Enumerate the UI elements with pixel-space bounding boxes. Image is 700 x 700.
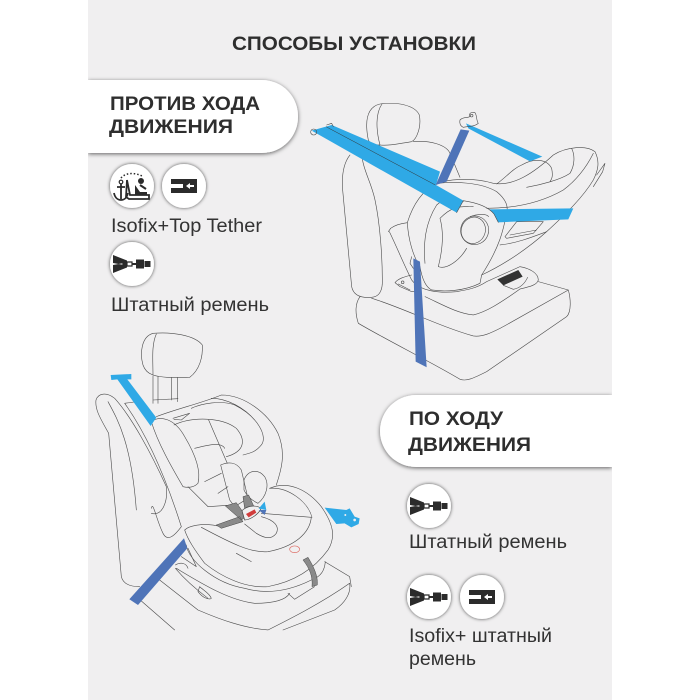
label: isofix plus seat belt: ремень [409, 649, 476, 670]
red logo mark [290, 546, 300, 553]
child seat shell [151, 418, 199, 487]
icon: isofix connector [460, 575, 504, 619]
icon: top tether [162, 164, 206, 208]
child seat body [407, 148, 598, 291]
pill: forward-facing heading: ПО ХОДУ [409, 409, 503, 430]
pill: rear-facing heading: ДВИЖЕНИЯ [109, 117, 233, 138]
icon: isofix anchor and seat [110, 164, 154, 208]
label: isofix plus seat belt [409, 626, 552, 670]
harness pads [221, 463, 248, 507]
blue belt straps [311, 112, 573, 367]
label: seat belt: Штатный ремень [111, 295, 269, 316]
car seat cushion [356, 282, 570, 380]
icon: seat belt [110, 242, 154, 286]
child seat base [389, 223, 538, 315]
pill: rear-facing heading: ПРОТИВ ХОДА [110, 94, 260, 115]
label: isofix plus seat belt: Isofix+ штатный [409, 626, 552, 647]
pill: forward-facing heading [380, 395, 612, 467]
isofix connector [395, 275, 421, 292]
lower harness strap [303, 557, 317, 587]
pill: rear-facing heading [88, 80, 298, 153]
isofix connector [175, 563, 211, 599]
label: isofix top tether: Isofix+Top Tether [111, 216, 263, 237]
support pedal [497, 270, 523, 285]
swivel knob [457, 212, 493, 249]
blue belt straps [111, 374, 360, 605]
illustration: forward-facing child seat [96, 333, 360, 630]
car seat back [342, 141, 460, 297]
car seat back [96, 394, 181, 587]
pill: forward-facing heading: ДВИЖЕНИЯ [408, 435, 531, 456]
label: seat belt forward: Штатный ремень [409, 532, 567, 553]
seat cushion and leg rest [185, 485, 333, 587]
illustration: rear-facing child seat [311, 103, 605, 380]
icon: seat belt second option [407, 575, 451, 619]
car seat cushion [136, 562, 351, 630]
page background [88, 0, 612, 700]
title: СПОСОБЫ УСТАНОВКИ [232, 34, 476, 55]
icon: seat belt forward [407, 484, 451, 528]
car seat headrest [367, 103, 420, 145]
buckle [216, 495, 266, 528]
car seat headrest [141, 333, 202, 403]
